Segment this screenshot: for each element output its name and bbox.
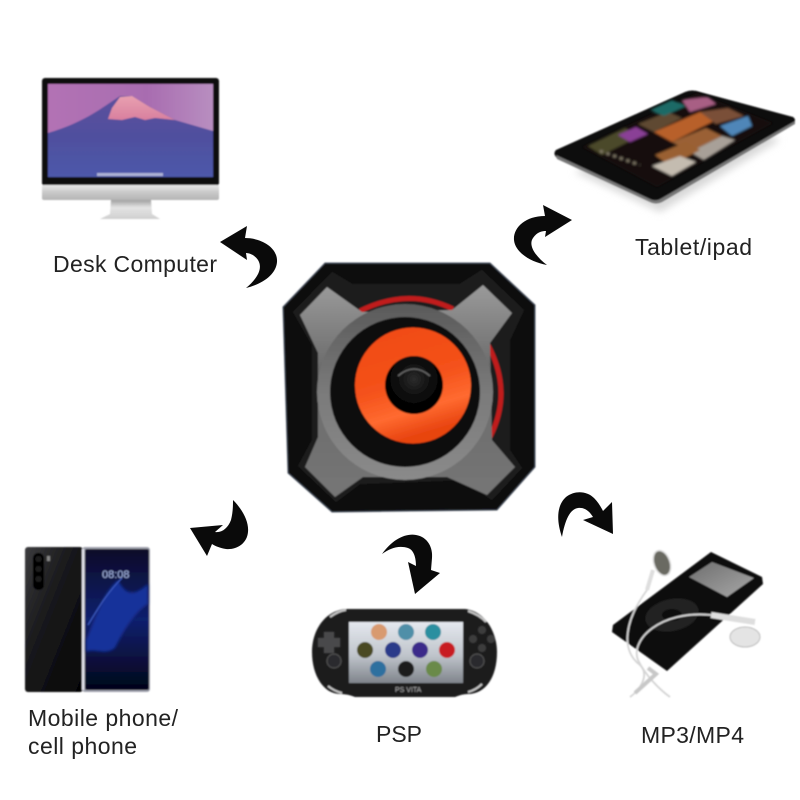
device: tablet: [554, 90, 795, 212]
d-pad: [318, 632, 340, 653]
label: mobile phone: Mobile phone/: [28, 705, 179, 731]
speaker body: [283, 263, 535, 512]
phone back: [25, 547, 83, 692]
console body: [312, 609, 497, 697]
arrow: to desk computer: [220, 226, 277, 288]
cables: [627, 590, 711, 697]
orange cone: [355, 328, 471, 444]
dust cap: [385, 356, 443, 414]
tablet body: [554, 90, 795, 202]
device: PSP: [312, 609, 497, 697]
label: mobile phone: [28, 705, 179, 759]
phone screen: [85, 549, 149, 690]
device: desk computer: [42, 78, 219, 219]
clock: 08:08: [102, 569, 130, 581]
click wheel: [642, 594, 702, 636]
speaker: [283, 263, 535, 512]
label: mobile phone: cell phone: [28, 733, 137, 759]
console screen: [349, 622, 463, 683]
wallpaper: [48, 84, 213, 177]
phone front: [82, 547, 150, 692]
arrow: to tablet: [514, 205, 572, 265]
grey ring: [317, 304, 493, 480]
chin: [42, 185, 219, 200]
label: tablet: Tablet/ipad: [635, 234, 752, 260]
tablet screen: [582, 93, 773, 187]
surround: [330, 317, 480, 467]
tablet shadow: [575, 110, 780, 212]
arrow: to MP3 player: [558, 492, 613, 537]
label: MP3/MP4: MP3/MP4: [641, 722, 744, 748]
silver corners: [328, 610, 486, 693]
earbud right: [730, 627, 760, 647]
earbud left: [650, 548, 674, 578]
action buttons: [469, 626, 495, 652]
device: mobile phone: [25, 547, 150, 692]
arrow: to mobile phone: [190, 500, 248, 556]
dock: [97, 173, 163, 176]
camera module: [33, 553, 44, 590]
right stick: [470, 654, 484, 668]
grey cross: [300, 285, 515, 497]
left stick: [327, 654, 341, 668]
monitor bezel: [42, 78, 219, 186]
mountain: [48, 96, 213, 177]
player body: [612, 552, 763, 671]
label: PSP: PSP: [376, 721, 422, 747]
player screen: [689, 562, 754, 597]
logo: PS VITA: [395, 687, 422, 694]
red arcs: [360, 298, 501, 437]
device: MP3 player: [612, 548, 763, 697]
app icons: [357, 624, 455, 677]
arrow: to PSP: [382, 535, 440, 594]
label: desk computer: Desk Computer: [53, 251, 217, 277]
screen waves: [86, 580, 148, 652]
stand: [100, 200, 160, 219]
screen tiles: [588, 128, 640, 155]
